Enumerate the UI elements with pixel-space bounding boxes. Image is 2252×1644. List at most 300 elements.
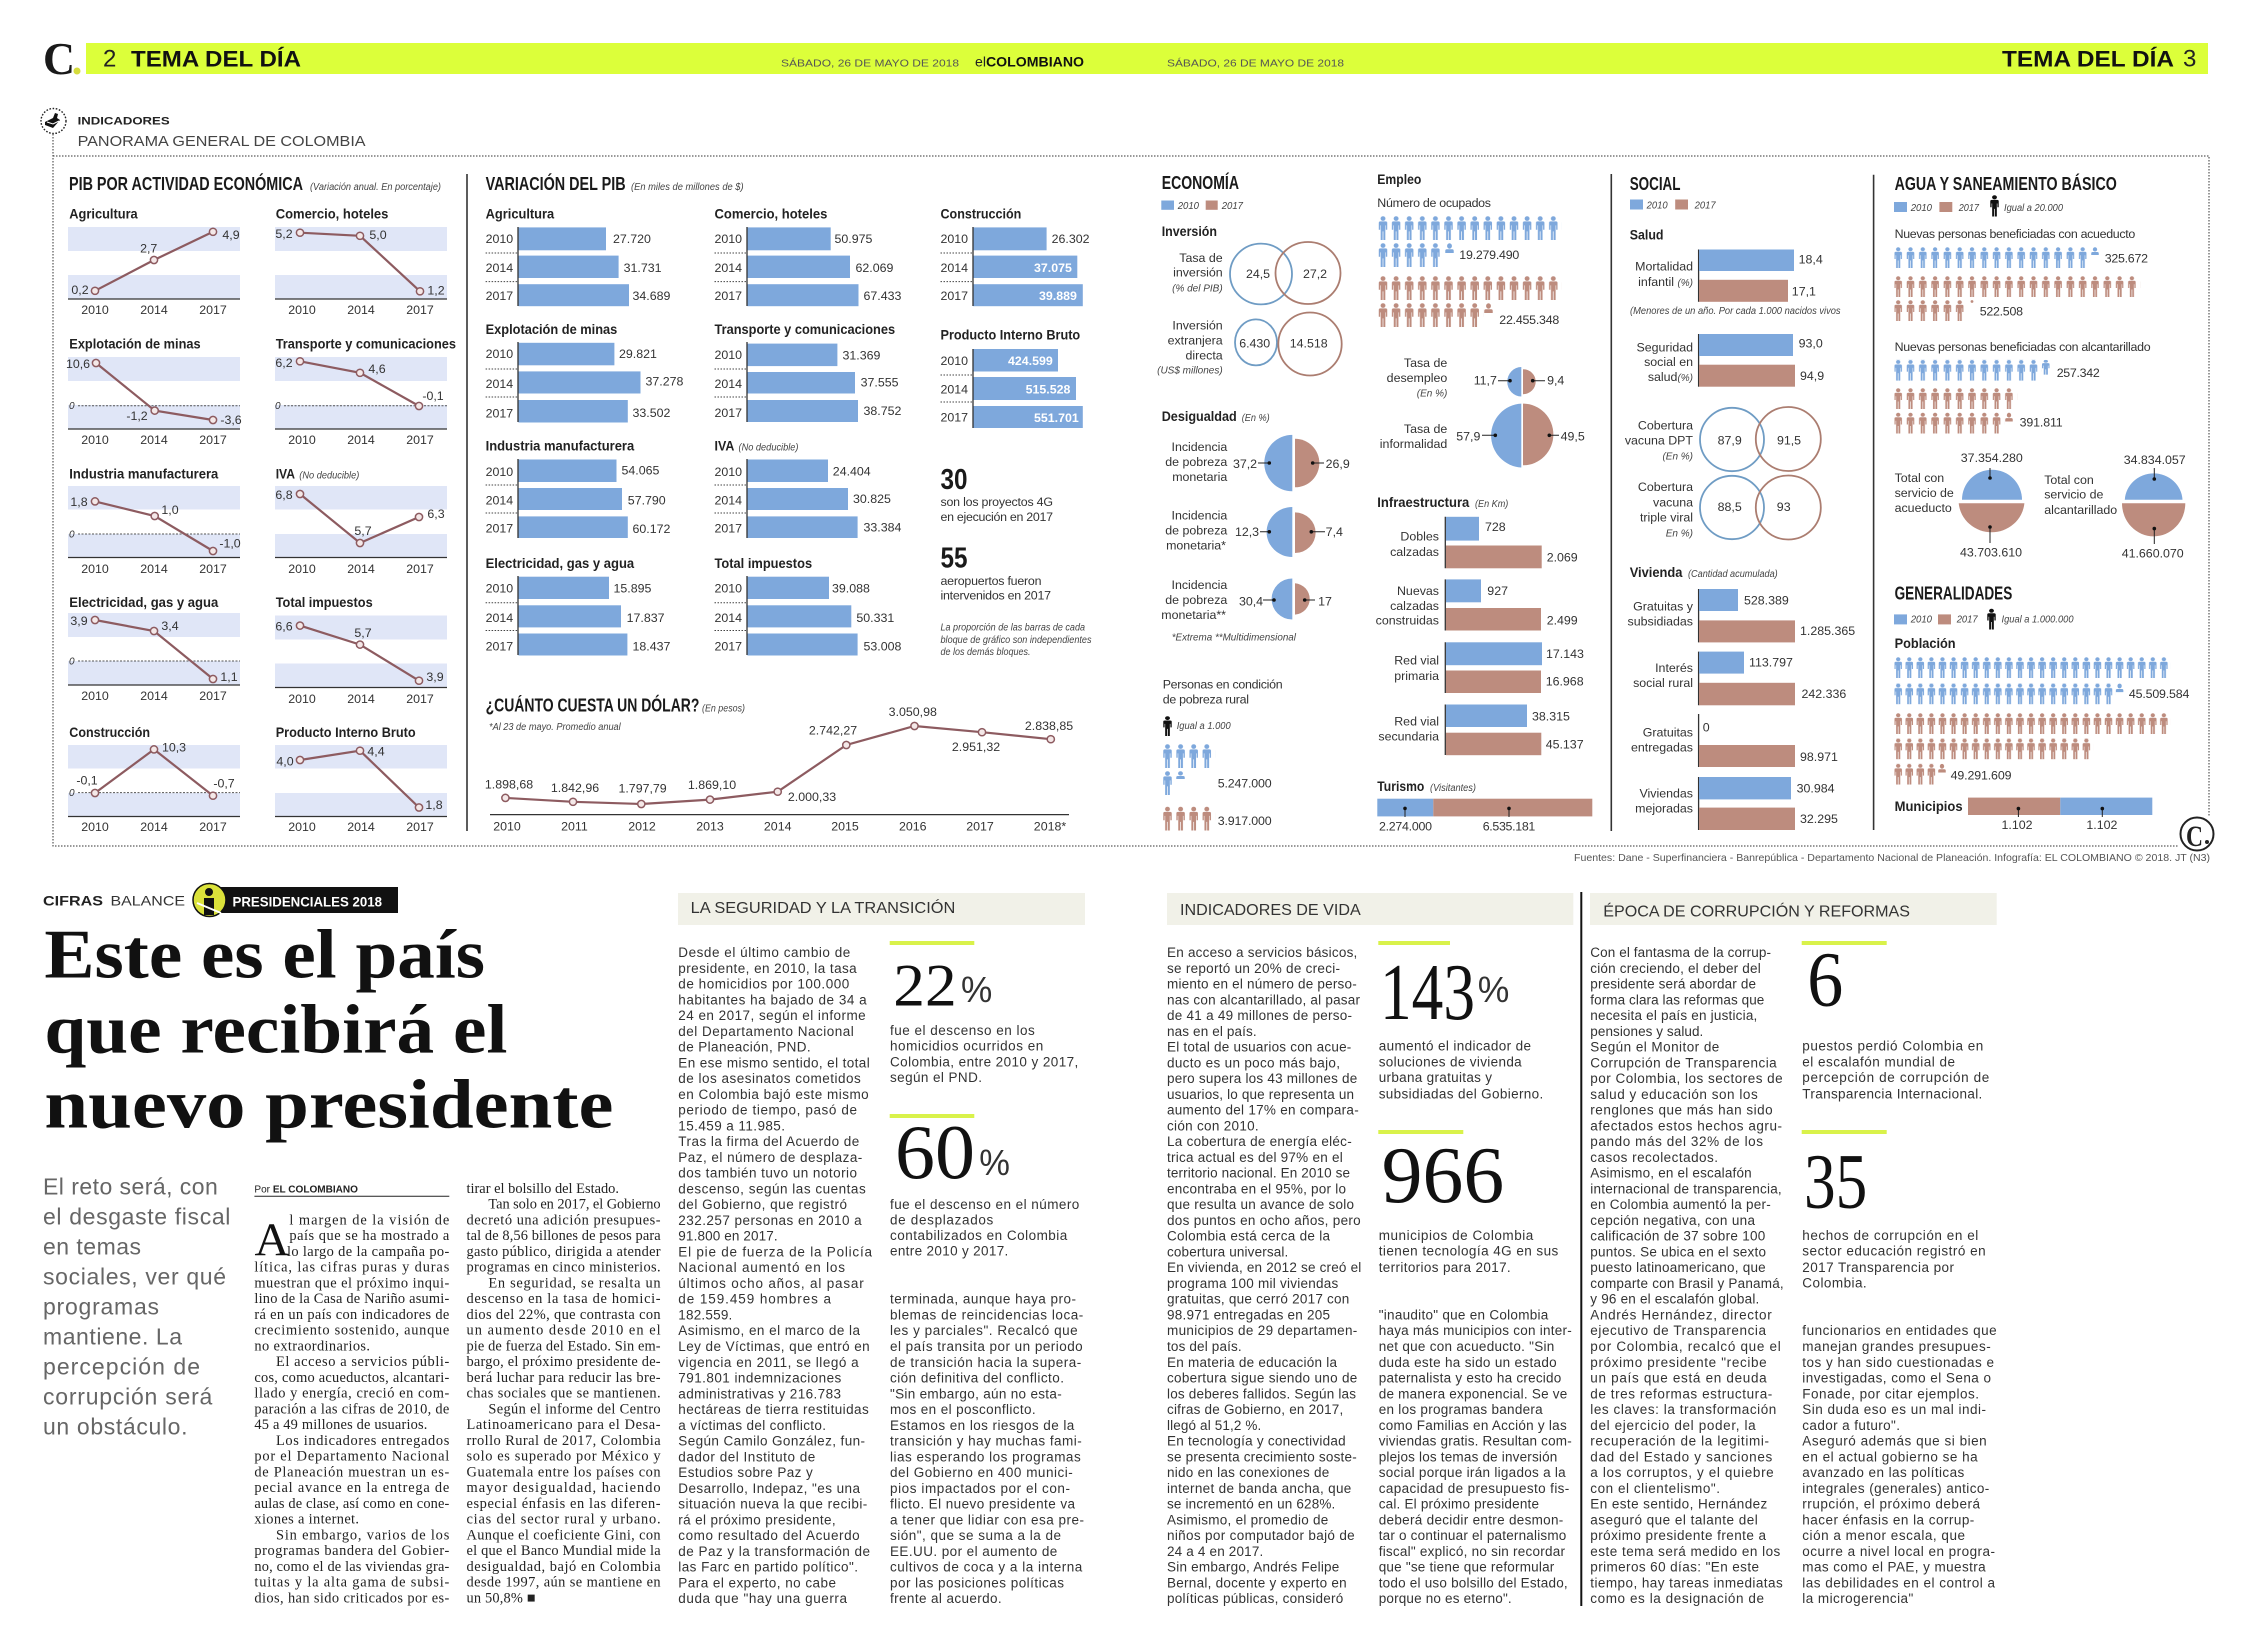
- pie: pobreza extrema: 7,4: [1326, 525, 1343, 539]
- body text continued: hacer énfasis en la corrup-: [1802, 1512, 1974, 1527]
- bar chart: Explotación de minas: 33.502: [632, 406, 671, 420]
- body text: aseguró que el talante del: [1590, 1512, 1758, 1527]
- deck: corrupción será: [43, 1384, 213, 1410]
- panel: Agua y saneamiento básico: [1894, 173, 2186, 561]
- line chart: Industria manufacturera: -1,0: [219, 537, 241, 551]
- body text: se presenta crecimiento soste-: [1167, 1449, 1357, 1464]
- deck: un obstáculo.: [43, 1414, 188, 1440]
- body text: duda que "hay una guerra: [678, 1591, 847, 1606]
- callout: 35: 35: [1804, 1138, 1867, 1224]
- venn: vacuna DPT: 87,9: [1718, 434, 1742, 448]
- pie: pobreza multidimensional: monetaria**: [1161, 608, 1226, 622]
- bar chart: Comercio, hoteles: 2010: [714, 232, 742, 246]
- line chart: Explotación de minas: 2017: [199, 433, 227, 447]
- callout: 966: tienen tecnología 4G en sus: [1379, 1244, 1559, 1259]
- circles: inversión extranjera: 14.518: [1290, 337, 1328, 351]
- bar chart: Transporte y comunicaciones: 38.752: [864, 404, 902, 418]
- body text: últimos ocho años, al pasar: [678, 1276, 864, 1291]
- deck: el desgaste fiscal: [43, 1203, 230, 1229]
- callout: 55 aeropuertos: aeropuertos fueron: [940, 574, 1042, 588]
- body text: casos recolectados.: [1590, 1150, 1718, 1165]
- body text continued: en el actual gobierno se ha: [1802, 1449, 1978, 1464]
- body text: pensiones y salud.: [1590, 1024, 1703, 1039]
- headline: que recibirá el: [44, 992, 507, 1069]
- circles: inversión extranjera: (US$ millones): [1157, 366, 1223, 377]
- venn: vacuna DPT: 91,5: [1777, 434, 1801, 448]
- line chart: dollar price: 2011: [561, 819, 588, 833]
- line chart: Electricidad, gas y agua: 3,9: [70, 614, 88, 628]
- callout: 6: puestos perdió Colombia en: [1802, 1039, 1983, 1054]
- body text continued: pios impactados por el con-: [890, 1481, 1070, 1496]
- line chart: IVA: 2014: [347, 562, 375, 576]
- body text: de tres reformas estructura-: [1590, 1386, 1772, 1401]
- bar chart: vivienda: subsidiadas: [1628, 614, 1693, 628]
- body text: El total de usuarios con acue-: [1167, 1040, 1351, 1055]
- body text continued: fiscal" explicó, no sin recordar: [1379, 1544, 1566, 1559]
- body text: presidente, en 2010, la tasa: [678, 961, 857, 976]
- article body column 2: el que el Banco Mundial mide la: [466, 1543, 661, 1559]
- body text: que resulta un avance de solo: [1167, 1197, 1354, 1212]
- heading: Inversión: Inversión: [1162, 224, 1217, 239]
- bar chart: IVA: 24.404: [833, 464, 871, 478]
- body text continued: como Familias en Acción y las: [1379, 1418, 1567, 1433]
- body text: las Farc en partido político".: [678, 1560, 858, 1575]
- body text: [678, 945, 872, 1606]
- article body column 2: un aumento desde 2010 en el: [466, 1323, 661, 1339]
- body text: rá el próximo presidente,: [678, 1512, 836, 1527]
- body text continued: lias esperando los programas: [890, 1449, 1081, 1464]
- body text: cobertura sigue siendo uno de: [1167, 1370, 1357, 1386]
- callout: 966: municipios de Colombia: [1379, 1228, 1534, 1243]
- bar chart: Industria manufacturera: [486, 439, 671, 538]
- body text: encontraba en el 95%, por lo: [1167, 1181, 1346, 1196]
- line chart: Electricidad, gas y agua: 2017: [199, 689, 227, 703]
- line chart: Total impuestos: Total impuestos: [276, 595, 373, 610]
- venn: tasa de inversión: Tasa de: [1179, 251, 1223, 265]
- body text: próximo presidente "recibe: [1590, 1355, 1767, 1370]
- body text continued: terminada, aunque haya pro-: [890, 1292, 1076, 1307]
- pictogram: alcantarillado: [1894, 340, 2151, 434]
- bar chart: Transporte y comunicaciones: [714, 322, 902, 422]
- body text: afectados estos hechos agru-: [1590, 1118, 1782, 1133]
- body text: [1167, 945, 1361, 1606]
- pictogram: pobreza rural: Igual a 1.000: [1177, 721, 1231, 732]
- body text: internacional de transparencia,: [1590, 1181, 1782, 1196]
- body text: Ley de Víctimas, que entró en: [678, 1339, 870, 1354]
- body text: salud y educación son los: [1590, 1087, 1758, 1102]
- pictogram: empleo: 22.455.348: [1499, 313, 1559, 327]
- bar chart: IVA: (No deducible): [738, 443, 798, 454]
- line chart: IVA: 5,7: [354, 524, 372, 538]
- bar chart: infraestructura: (En Km): [1475, 499, 1508, 510]
- body text: descenso, según las cuentas: [678, 1181, 866, 1196]
- body text: ducto es un poco más bajo,: [1167, 1055, 1340, 1070]
- callout: 60%: de desplazados: [890, 1212, 994, 1228]
- headline: [44, 917, 613, 1144]
- body text: llegó al 51,2 %.: [1167, 1418, 1261, 1433]
- bar chart: Construcción: [940, 207, 1090, 306]
- body text: puntos. Se ubica en el sexto: [1590, 1244, 1766, 1259]
- bar chart: infraestructura: construidas: [1376, 614, 1439, 628]
- stacked bar: turismo: (Visitantes): [1430, 783, 1476, 794]
- pictogram: pobreza rural: de pobreza rural: [1163, 693, 1249, 707]
- panel title: AGUA Y SANEAMIENTO BÁSICO: [1895, 173, 2117, 194]
- body text: y 96 en el escalafón global.: [1590, 1292, 1759, 1307]
- body text: nas en el país.: [1167, 1024, 1257, 1039]
- callout: 22%: Colombia, entre 2010 y 2017,: [890, 1055, 1078, 1070]
- line chart: IVA: 6,3: [427, 507, 445, 521]
- legend: 2010: [1910, 203, 1932, 214]
- line chart: Construcción: Construcción: [69, 725, 150, 740]
- line chart: dollar price: 2015: [831, 819, 859, 833]
- callout: 35: hechos de corrupción en el: [1802, 1228, 1978, 1243]
- bar chart: infraestructura: Nuevas: [1397, 584, 1439, 598]
- pie: pobreza extrema: 12,3: [1235, 525, 1259, 539]
- body text: de Paz y la transformación de: [678, 1544, 870, 1559]
- legend: [1161, 200, 1243, 212]
- pie: tasa de desempleo: desempleo: [1387, 371, 1447, 385]
- body text: niños por computador bajó de: [1167, 1528, 1355, 1543]
- line chart: dollar price: 2.000,33: [788, 790, 836, 804]
- bar chart: infraestructura: secundaria: [1378, 730, 1439, 744]
- callout: 6: el escalafón mundial de: [1802, 1055, 1955, 1070]
- article body column 2: Tan solo en 2017, el Gobierno: [488, 1197, 661, 1213]
- pie: pobreza multidimensional: de pobreza: [1165, 593, 1227, 607]
- article body column 1: El acceso a servicios públi-: [276, 1354, 450, 1370]
- body text: necesita el país en justicia,: [1590, 1008, 1757, 1023]
- bar chart: vivienda: social rural: [1633, 676, 1693, 690]
- article body column 2: decretó una adición presupues-: [466, 1212, 661, 1228]
- stacked bar: municipios: 1.102: [2086, 818, 2118, 832]
- line chart: Agricultura: [68, 207, 240, 317]
- body text: 15.459 a 11.985.: [678, 1118, 785, 1133]
- line chart: dollar price: 2014: [764, 819, 792, 833]
- bar chart: infraestructura: [1376, 495, 1584, 755]
- callout: 143%: subsidiadas del Gobierno.: [1379, 1086, 1543, 1101]
- legend: 2017: [1958, 203, 1979, 214]
- article body column 1: lítica, las cifras puras y duras: [254, 1260, 450, 1276]
- pie: alcantarillado total: 41.660.070: [2122, 546, 2184, 560]
- body text continued: Sin duda eso es un mal indi-: [1802, 1402, 1986, 1417]
- body text: nas con alcantarillado, al pasar: [1167, 992, 1360, 1007]
- heading: Desigualdad: Desigualdad: [1162, 409, 1237, 424]
- body text: políticas públicas, consideró: [1167, 1591, 1343, 1606]
- pie: acueducto total: [1895, 451, 2024, 560]
- bar chart: Total impuestos: 2017: [714, 639, 742, 653]
- body text: a los corruptos, y el quiebre: [1590, 1465, 1774, 1480]
- pictogram: acueducto: 522.508: [1980, 305, 2023, 319]
- line chart: Industria manufacturera: Industria manufacturera: [69, 466, 219, 482]
- bar chart: mortalidad infantil: 18,4: [1799, 253, 1823, 267]
- stacked bar: turismo: 6.535.181: [1483, 819, 1535, 833]
- body text continued: ocurre a nivel local en progra-: [1802, 1544, 1995, 1559]
- line chart: Explotación de minas: [66, 336, 242, 447]
- header band: [43, 33, 2208, 84]
- line chart: IVA: 2017: [406, 562, 434, 576]
- line chart: Electricidad, gas y agua: 2010: [81, 689, 109, 703]
- article body column 2: desigualdad, bajó en Colombia: [466, 1559, 661, 1575]
- deck: El reto será, con: [43, 1173, 218, 1199]
- bar chart: Electricidad, gas y agua: 2010: [486, 582, 513, 596]
- body text: El pie de fuerza de la Policía: [678, 1244, 872, 1259]
- body text: periodo de tiempo, pasó de: [678, 1103, 857, 1118]
- section heading: INDICADORES DE VIDA: [1180, 902, 1361, 919]
- article body column 1: no extraordinarios.: [254, 1338, 370, 1354]
- callout: 30 proyectos 4G: en ejecución en 2017: [940, 510, 1053, 524]
- bar chart: Construcción: 2010: [940, 232, 968, 246]
- logo C: C: [43, 33, 75, 84]
- deck: [43, 1173, 230, 1440]
- body text: Sin embargo, Andrés Felipe: [1167, 1560, 1339, 1575]
- callout: 966: territorios para 2017.: [1379, 1260, 1511, 1275]
- section heading: LA SEGURIDAD Y LA TRANSICIÓN: [691, 900, 955, 917]
- line chart: Industria manufacturera: [68, 466, 241, 576]
- body text: hectáreas de tierra restituidas: [678, 1402, 869, 1417]
- pie: pobreza multidimensional: 30,4: [1239, 594, 1263, 608]
- legend: 2010: [1177, 201, 1199, 212]
- bar chart: vivienda: 98.971: [1800, 750, 1838, 764]
- bar chart: infraestructura: primaria: [1394, 669, 1439, 683]
- bar chart: Industria manufacturera: 2014: [486, 494, 513, 508]
- line chart: Agricultura: 4,9: [222, 228, 240, 242]
- legend: Igual a 20.000: [2004, 203, 2063, 214]
- body text continued: viviendas gratis. Resultan com-: [1379, 1434, 1572, 1449]
- body text: forma clara las reformas que: [1590, 992, 1764, 1007]
- body text: 91.800 en 2017.: [678, 1229, 778, 1244]
- venn: vacuna triple viral: 88,5: [1718, 500, 1742, 514]
- article body column 2: dios del 22%, que contrasta con: [466, 1307, 661, 1323]
- body text: Desde el último cambio de: [678, 945, 850, 960]
- bar chart: Electricidad, gas y agua: 18.437: [632, 639, 671, 653]
- body text: del Gobierno, que registró: [678, 1197, 847, 1212]
- bar chart: Agricultura: 31.731: [624, 261, 662, 275]
- venn: tasa de inversión: inversión: [1173, 266, 1223, 280]
- article body column 2: Latinoamericano para el Desa-: [466, 1417, 661, 1433]
- panel: Social: [1625, 174, 1855, 830]
- line chart: Transporte y comunicaciones: [275, 336, 456, 447]
- callout: 6: percepción de corrupción de: [1802, 1070, 1989, 1085]
- article body column 1: aulas de clase, así como en cone-: [254, 1496, 450, 1512]
- legend: 2017: [1694, 201, 1716, 212]
- body text: ción creciendo, el deber del: [1590, 961, 1761, 976]
- body text continued: duda este ha sido un estado: [1379, 1355, 1557, 1370]
- body text: se reportó un 20% de creci-: [1167, 961, 1340, 976]
- badge: [193, 884, 398, 916]
- line chart: IVA: IVA: [276, 466, 295, 482]
- note: de los demás bloques.: [940, 647, 1030, 658]
- pictogram: acueducto: [1894, 227, 2148, 321]
- line chart: Comercio, hoteles: 2010: [288, 303, 316, 317]
- line chart: Comercio, hoteles: Comercio, hoteles: [276, 207, 388, 222]
- bar chart: vivienda: mejoradas: [1635, 802, 1693, 816]
- line chart: dollar price: (En pesos): [702, 704, 745, 714]
- article body column 1: cos, como acueductos, alcantari-: [254, 1370, 450, 1386]
- callout: 60%: fue el descenso en el número: [890, 1197, 1079, 1212]
- deck: sociales, ver qué: [43, 1264, 226, 1290]
- pie: tasa de desempleo: (En %): [1417, 388, 1447, 400]
- line chart: dollar price: 2.838,85: [1025, 719, 1073, 733]
- body text continued: rrupción, el próximo deberá: [1802, 1497, 1980, 1512]
- callout: 35: sector educación registró en: [1802, 1244, 1986, 1259]
- panel frame and heading: [41, 108, 2209, 846]
- body text: municipios de 29 departamen-: [1167, 1323, 1357, 1338]
- body text continued: cultivos de coca y a la interna: [890, 1560, 1083, 1575]
- callout: 6: [1802, 936, 1989, 1101]
- line chart: Electricidad, gas y agua: 3,4: [161, 619, 179, 633]
- body text: por Colombia, recalcó que el: [1590, 1339, 1781, 1354]
- heading: Salud: Salud: [1630, 227, 1664, 242]
- article body column 2: tirar el bolsillo del Estado.: [466, 1181, 619, 1197]
- panel: La seguridad y la transición: [678, 893, 1085, 1606]
- bar chart: infraestructura: Red vial: [1394, 653, 1439, 667]
- body text: en Colombia bajó este mismo: [678, 1087, 869, 1102]
- date left: SÁBADO, 26 DE MAYO DE 2018: [781, 56, 959, 69]
- bar chart: vivienda: 528.389: [1744, 593, 1789, 607]
- body text continued: Fonade, por citar ejemplos.: [1802, 1386, 1979, 1401]
- panel title: VARIACIÓN DEL PIB: [486, 173, 626, 194]
- body text: por Colombia, los sectores de: [1590, 1071, 1783, 1086]
- page number right: 3: [2183, 46, 2196, 73]
- pie: pobreza extrema: monetaria*: [1166, 538, 1226, 552]
- pictogram: alcantarillado: Nuevas personas beneficiadas con alcantarillado: [1895, 340, 2151, 354]
- article body column 2: tal de 8,56 billones de pesos para: [466, 1228, 661, 1244]
- bar chart: Construcción: 2017: [940, 289, 968, 303]
- line chart: Electricidad, gas y agua: [68, 595, 240, 703]
- line chart: dollar price: 2.951,32: [952, 740, 1000, 754]
- body text continued: integrales (generales) antico-: [1802, 1481, 1989, 1496]
- panel: Época de corrupción y reformas: [1590, 893, 1997, 1606]
- callout: 143%: aumentó el indicador de: [1379, 1039, 1531, 1054]
- pictogram: población: 49.291.609: [1951, 769, 2012, 783]
- body text: recuperación de la legitimi-: [1590, 1434, 1769, 1449]
- venn: tasa de inversión: [1172, 242, 1340, 304]
- line chart: Total impuestos: 3,9: [426, 670, 444, 684]
- byline: Por EL COLOMBIANO: [254, 1183, 358, 1195]
- circles: inversión extranjera: directa: [1185, 348, 1223, 362]
- bar chart: infraestructura: Dobles: [1400, 530, 1439, 544]
- line chart: dollar price: 1.842,96: [551, 781, 599, 795]
- legend: [1894, 195, 2063, 216]
- drop cap: A: [254, 1214, 290, 1266]
- body text continued: flicto. El nuevo presidente va: [890, 1497, 1075, 1512]
- body text: Asimismo, en el marco de la: [678, 1323, 860, 1338]
- body text: Corrupción de Transparencia: [1590, 1055, 1777, 1070]
- bar chart: Comercio, hoteles: 62.069: [856, 261, 894, 275]
- venn: vacuna DPT: [1625, 407, 1821, 471]
- pictogram: pobreza rural: [1163, 678, 1283, 830]
- panel title: ECONOMÍA: [1162, 172, 1239, 193]
- article body column 2: pie de fuerza del Estado. Sin em-: [466, 1338, 661, 1354]
- body text: de los asesinatos cometidos: [678, 1071, 861, 1086]
- article body column 2: programas en cinco ministerios.: [466, 1260, 661, 1276]
- line chart: Agricultura: 2010: [81, 303, 109, 317]
- pie: pobreza monetaria: Incidencia: [1172, 440, 1227, 454]
- bar chart: Electricidad, gas y agua: 17.837: [627, 611, 665, 625]
- line chart: IVA: 6,8: [275, 488, 293, 502]
- article body column 1: pecial avance en la entrega de: [254, 1480, 449, 1496]
- callout: 60%: contabilizados en Colombia: [890, 1228, 1068, 1243]
- body text: Asimismo, en el escalafón: [1590, 1166, 1752, 1181]
- body text: dos puntos en ocho años, pero: [1167, 1213, 1361, 1228]
- body text: vigencia en 2011, se llegó a: [678, 1355, 859, 1370]
- bar chart: IVA: 33.384: [864, 520, 902, 534]
- body text: cobertura universal.: [1167, 1244, 1288, 1259]
- bar chart: Transporte y comunicaciones: 2014: [714, 377, 742, 391]
- line chart: Agricultura: 2017: [199, 303, 227, 317]
- line chart: Electricidad, gas y agua: 2014: [140, 689, 168, 703]
- body text: En tecnología y conectividad: [1167, 1434, 1346, 1449]
- callout: 6: Transparencia Internacional.: [1802, 1086, 1982, 1101]
- callout: 35: 2017 Transparencia por: [1802, 1260, 1954, 1275]
- callout: 60%: [890, 1109, 1079, 1259]
- pie: tasa de desempleo: Tasa de: [1404, 356, 1447, 370]
- legend: [1894, 609, 2074, 630]
- callout: 22%: según el PND.: [890, 1070, 982, 1085]
- body text continued: capacidad de presupuesto fis-: [1379, 1481, 1569, 1496]
- body text continued: del Gobierno en 400 munici-: [890, 1465, 1073, 1480]
- pie: pobreza monetaria: de pobreza: [1165, 455, 1227, 469]
- bar chart: Explotación de minas: 29.821: [619, 347, 657, 361]
- body text continued: las debilidades en el control a: [1802, 1575, 1995, 1590]
- deck: en temas: [43, 1234, 141, 1260]
- bar chart: Producto Interno Bruto: Producto Interno Bruto: [940, 328, 1080, 343]
- callout: 143%: 143: [1380, 949, 1475, 1037]
- pictogram: acueducto: Nuevas personas beneficiadas con acueducto: [1895, 227, 2135, 241]
- bar chart: Construcción: 37.075: [1034, 261, 1072, 275]
- article body column 2: un 50,8% ■: [466, 1590, 536, 1606]
- callout: 22%: homicidios ocurridos en: [890, 1039, 1043, 1054]
- bar chart: seguridad social: social en: [1644, 355, 1693, 369]
- bar chart: Explotación de minas: 2017: [486, 407, 513, 421]
- bar chart: Producto Interno Bruto: 2010: [940, 354, 968, 368]
- body text: los deberes fallidos. Según las: [1167, 1386, 1356, 1401]
- line chart: Industria manufacturera: 0: [69, 530, 75, 540]
- bar chart: infraestructura: 16.968: [1546, 674, 1584, 688]
- line chart: dollar price: 1.898,68: [485, 778, 533, 792]
- bar chart: Total impuestos: 39.088: [832, 582, 870, 596]
- pie: alcantarillado total: alcantarillado: [2044, 503, 2117, 517]
- line chart: Transporte y comunicaciones: 0: [275, 401, 281, 412]
- pie: tasa de informalidad: informalidad: [1380, 437, 1447, 451]
- article body column 1: rá en un país con indicadores de: [254, 1307, 449, 1323]
- body text: administrativas y 216.783: [678, 1386, 841, 1401]
- body text: próximo presidente frente a: [1590, 1528, 1766, 1543]
- bar chart: Producto Interno Bruto: 2017: [940, 411, 968, 425]
- headline: nuevo presidente: [44, 1067, 613, 1144]
- body text continued: paternalista y esto ha crecido: [1379, 1370, 1561, 1386]
- pie: acueducto total: 43.703.610: [1960, 546, 2022, 560]
- line chart: Industria manufacturera: 2010: [81, 562, 109, 576]
- callout: 60%: 60: [895, 1109, 975, 1195]
- line chart: Producto Interno Bruto: 4,0: [276, 755, 294, 769]
- body text continued: ción definitiva del conflicto.: [890, 1370, 1064, 1386]
- note: bloque de gráfico son independientes: [940, 635, 1092, 646]
- venn: tasa de inversión: (% del PIB): [1172, 283, 1223, 294]
- line chart: Electricidad, gas y agua: 1,1: [220, 670, 238, 684]
- callout: 30 proyectos 4G: [940, 464, 1053, 524]
- line chart: dollar price: [485, 694, 1073, 833]
- bar chart: seguridad social: Seguridad: [1636, 340, 1693, 354]
- bar chart: Transporte y comunicaciones: 2010: [714, 348, 742, 362]
- panel subtitle: (Variación anual. En porcentaje): [310, 182, 441, 193]
- pie: tasa de informalidad: 49,5: [1561, 430, 1585, 444]
- article body column 2: desde 1997, aún se mantiene en: [466, 1575, 661, 1591]
- line chart: dollar price: 2010: [493, 819, 521, 833]
- bar chart: Agricultura: [486, 207, 671, 306]
- body text: Desarrollo, Indepaz, "es una: [678, 1481, 860, 1496]
- stacked bar: turismo: Turismo: [1377, 779, 1424, 794]
- sources: Fuentes: Dane - Superfinanciera - Banrepública - Departamento Nacional de Planeación. Infografía: EL COLOMBIANO © 2018. JT (N3): [1574, 852, 2210, 864]
